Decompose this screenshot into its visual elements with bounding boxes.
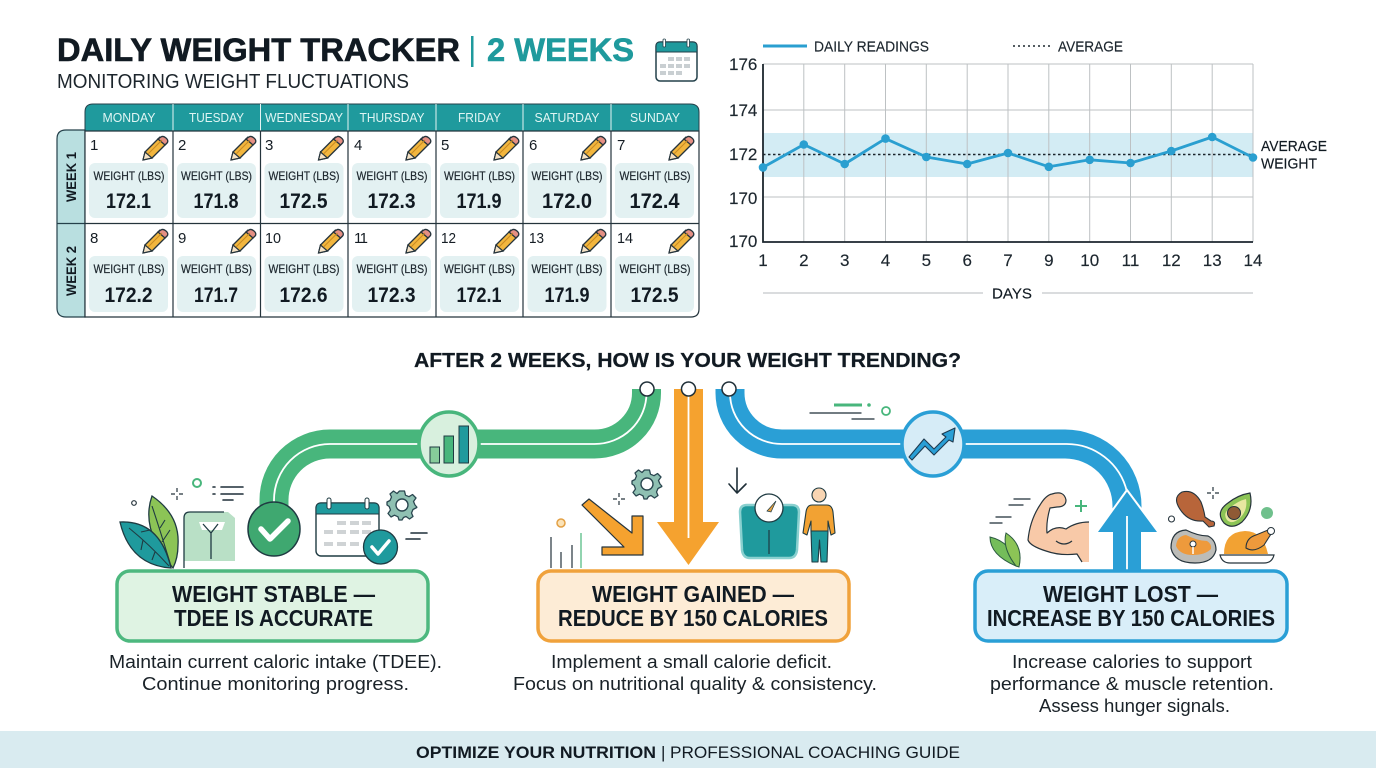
day 8: 172.2: [104, 284, 152, 307]
day 9: [177, 229, 256, 312]
text: gained description: Focus on nutritional quality & consistency.: [513, 674, 877, 694]
day 4: 172.3: [368, 190, 416, 213]
day 6: WEIGHT (LBS): [532, 169, 602, 183]
day 14: WEIGHT (LBS): [620, 262, 690, 276]
x axis labels: 6: [962, 251, 972, 270]
table header row: TUESDAY: [189, 111, 245, 125]
text: lost description: Assess hunger signals.: [1039, 696, 1230, 716]
day 10: 10: [265, 230, 281, 247]
title: 2 WEEKS: [487, 32, 634, 68]
day 12: 12: [441, 230, 456, 247]
footer: [0, 731, 1376, 768]
text: gained description: [513, 652, 877, 694]
icon: gear: [387, 491, 417, 520]
day 10: 172.6: [280, 284, 328, 307]
day 6: 172.0: [542, 190, 592, 213]
average band: [763, 133, 1253, 177]
day 11: 172.3: [368, 284, 416, 307]
day 8: [89, 229, 168, 312]
flow: blue path: [722, 382, 1159, 571]
decorative marks: gained: [551, 468, 746, 568]
icon: leaves: [120, 496, 178, 568]
day 1: [89, 136, 168, 218]
y axis labels: 172: [729, 145, 757, 164]
x axis labels: 14: [1244, 251, 1262, 270]
subtitle: MONITORING WEIGHT FLUCTUATIONS: [57, 70, 409, 93]
day 6: [528, 136, 606, 218]
x axis labels: 5: [922, 251, 931, 270]
panel: weight gained: WEIGHT GAINED —: [592, 581, 794, 607]
panel: weight stable: TDEE IS ACCURATE: [174, 605, 373, 631]
x axis labels: 4: [881, 251, 890, 270]
day 3: WEIGHT (LBS): [268, 169, 340, 183]
day 4: [352, 136, 431, 218]
text: lost description: performance & muscle retention.: [990, 674, 1274, 694]
table header row: WEDNESDAY: [265, 111, 344, 125]
x axis labels: 9: [1044, 251, 1054, 270]
x axis labels: 2: [799, 251, 809, 270]
icon: flexed arm: [1028, 493, 1089, 562]
icon: trend badge: [902, 412, 964, 476]
daily readings line: [759, 133, 1257, 172]
day 12: 172.1: [456, 284, 502, 307]
table header row: [85, 104, 699, 131]
panel: weekly weight table: [57, 104, 699, 317]
icon: steak: [1171, 530, 1216, 563]
panel: weight stable: [117, 571, 428, 641]
day 7: 172.4: [630, 190, 680, 213]
average weight label: AVERAGE: [1261, 139, 1327, 155]
y axis labels: 174: [729, 101, 757, 120]
table grid: [85, 131, 699, 317]
day 14: 14: [617, 230, 633, 247]
day 3: [264, 136, 344, 218]
day 7: [615, 136, 694, 218]
x axis labels: 10: [1080, 251, 1099, 270]
day 11: [352, 229, 431, 312]
x axis labels: [758, 251, 1262, 270]
day 6: 6: [529, 137, 537, 154]
title: [57, 32, 634, 68]
decorative marks: lost: [810, 403, 1273, 523]
chart legend: DAILY READINGS: [814, 40, 929, 56]
chart grid: [763, 64, 1253, 242]
day 8: 8: [90, 230, 98, 247]
day 13: 13: [529, 230, 544, 247]
day 1: 172.1: [106, 190, 151, 213]
footer: |: [661, 743, 665, 762]
text: gained description: Implement a small calorie deficit.: [551, 652, 832, 672]
day 5: 171.9: [456, 190, 502, 213]
decorative marks: stable: [132, 479, 427, 539]
day 4: WEIGHT (LBS): [356, 169, 428, 183]
day 9: 171.7: [194, 284, 238, 307]
text: stable description: [109, 652, 442, 694]
footer: PROFESSIONAL COACHING GUIDE: [670, 743, 960, 762]
icon: check badge: [248, 502, 300, 556]
title: DAILY WEIGHT TRACKER: [57, 32, 460, 68]
icon group: lost: [810, 403, 1274, 567]
x axis labels: 7: [1003, 251, 1013, 270]
y axis labels: 176: [729, 55, 757, 74]
flow: green path: [274, 382, 654, 525]
day 8: WEIGHT (LBS): [94, 262, 164, 276]
flow: orange arrow: [657, 382, 719, 565]
day 10: [264, 229, 344, 312]
day 11: 11: [354, 230, 368, 247]
day 10: WEIGHT (LBS): [268, 262, 340, 276]
chart legend: [763, 40, 1123, 56]
day 3: 172.5: [280, 190, 328, 213]
day 13: [528, 229, 606, 312]
table header row: MONDAY: [102, 111, 156, 125]
text: stable description: Continue monitoring progress.: [142, 674, 409, 694]
table header row: SATURDAY: [534, 111, 600, 125]
day 7: 7: [617, 137, 625, 154]
y axis labels: 170: [729, 189, 757, 208]
day 11: WEIGHT (LBS): [356, 262, 428, 276]
icon: bar chart badge: [419, 412, 479, 476]
icon: bathroom scale: [740, 494, 799, 558]
average weight label: [1261, 139, 1327, 172]
day 9: WEIGHT (LBS): [181, 262, 252, 276]
icon: calendar: [656, 39, 697, 81]
x axis labels: 1: [758, 251, 768, 270]
day 1: WEIGHT (LBS): [94, 169, 164, 183]
day 13: 171.9: [544, 284, 590, 307]
icon: calendar with check: [316, 498, 398, 564]
panel: weight lost: INCREASE BY 150 CALORIES: [987, 605, 1275, 631]
panel: weight lost: WEIGHT LOST —: [1043, 581, 1218, 607]
panel: weight lost: [975, 571, 1287, 641]
y axis labels: [729, 55, 757, 251]
icon: small leaves: [990, 533, 1020, 567]
average weight label: WEIGHT: [1261, 156, 1317, 172]
table header row: SUNDAY: [630, 111, 681, 125]
day 2: [177, 136, 256, 218]
icon: drumstick: [1176, 491, 1215, 527]
day 5: WEIGHT (LBS): [444, 169, 515, 183]
table header row: FRIDAY: [458, 111, 502, 125]
panel: weight stable: WEIGHT STABLE —: [172, 581, 375, 607]
chart axes: [763, 64, 1253, 242]
day 2: WEIGHT (LBS): [181, 169, 252, 183]
text: lost description: [990, 652, 1274, 716]
day 12: WEIGHT (LBS): [444, 262, 515, 276]
day 5: 5: [441, 137, 449, 154]
day 2: 2: [178, 137, 186, 154]
question heading: AFTER 2 WEEKS, HOW IS YOUR WEIGHT TRENDING?: [414, 350, 961, 372]
week labels column: [57, 130, 85, 317]
day 1: 1: [90, 137, 98, 154]
day 5: [440, 136, 519, 218]
day 7: WEIGHT (LBS): [620, 169, 690, 183]
icon: roast chicken: [1220, 528, 1274, 563]
panel: weight gained: REDUCE BY 150 CALORIES: [558, 605, 828, 631]
icon group: gained: [551, 468, 835, 568]
icon: shirt scale: [184, 512, 235, 568]
chart legend: AVERAGE: [1058, 40, 1123, 56]
footer: OPTIMIZE YOUR NUTRITION: [416, 743, 656, 762]
text: stable description: Maintain current caloric intake (TDEE).: [109, 652, 442, 672]
y axis labels: 170: [729, 232, 757, 251]
icon group: stable: [120, 479, 427, 568]
icon: down-right arrow: [582, 499, 643, 555]
day 14: [615, 229, 694, 312]
day 3: 3: [265, 137, 273, 154]
x axis labels: 3: [840, 251, 849, 270]
average line: [763, 154, 1253, 156]
day 2: 171.8: [194, 190, 239, 213]
x axis labels: 11: [1122, 251, 1139, 270]
panel: line chart: [729, 40, 1327, 302]
day 4: 4: [354, 137, 362, 154]
day 9: 9: [178, 230, 186, 247]
day 14: 172.5: [630, 284, 679, 307]
icon: person: [803, 488, 835, 562]
x axis labels: 12: [1162, 251, 1181, 270]
week labels column: WEEK 2: [64, 246, 79, 296]
week labels column: WEEK 1: [64, 152, 79, 202]
x axis labels: 13: [1203, 251, 1222, 270]
icon: avocado: [1220, 493, 1251, 526]
day 12: [440, 229, 519, 312]
day 13: WEIGHT (LBS): [532, 262, 602, 276]
days axis title: DAYS: [992, 286, 1032, 302]
table header row: THURSDAY: [360, 111, 425, 125]
text: lost description: Increase calories to support: [1012, 652, 1252, 672]
panel: weight gained: [538, 571, 849, 641]
icon: gear: [632, 470, 662, 499]
